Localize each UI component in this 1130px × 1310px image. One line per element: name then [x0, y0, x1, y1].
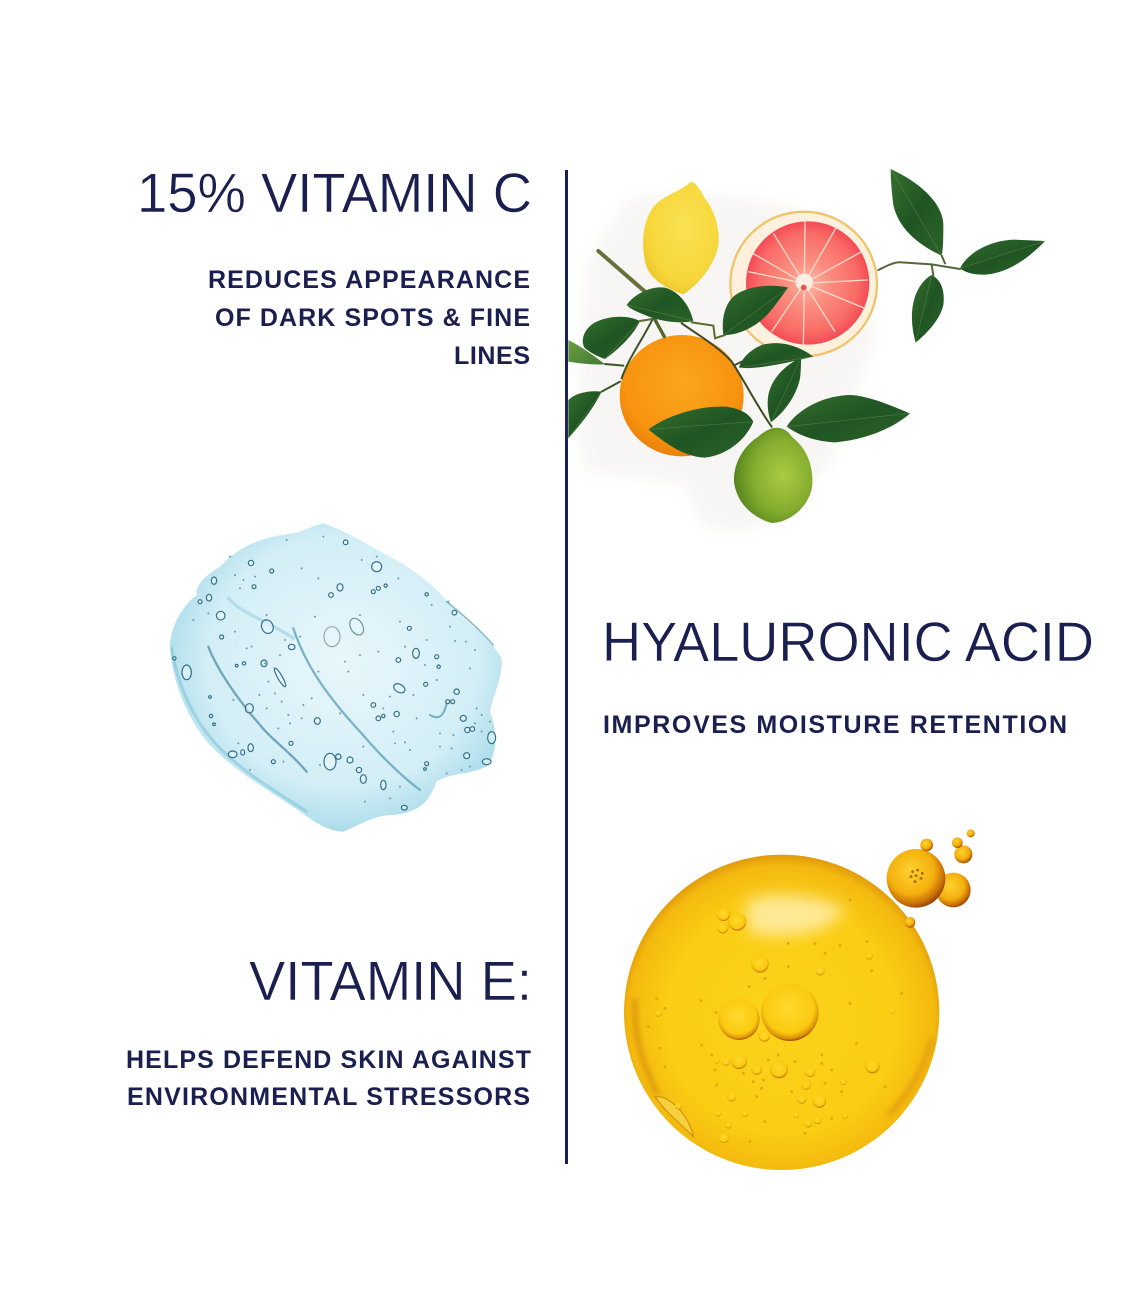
- text block: vitamin C benefit: OF DARK SPOTS & FINE: [215, 304, 530, 332]
- text block: vitamin E benefit: ENVIRONMENTAL STRESSORS: [127, 1083, 530, 1111]
- leaves: [568, 169, 1045, 458]
- lemon: [643, 182, 719, 294]
- gel bubbles: [173, 540, 496, 810]
- text block: vitamin C benefit: REDUCES APPEARANCE: [208, 266, 530, 294]
- centre divider line: [565, 170, 568, 1164]
- satellite inner bubble cluster: [911, 870, 922, 882]
- outer satellite bubbles: [887, 829, 975, 928]
- text block: vitamin C benefit: [208, 266, 530, 370]
- heading: 15% Vitamin C: 15% VITAMIN C: [137, 161, 532, 224]
- panel: hyaluronic acid text: [602, 610, 1094, 739]
- grapefruit: [730, 212, 877, 356]
- text block: hyaluronic acid benefit: IMPROVES MOISTURE RETENTION: [603, 711, 1067, 739]
- oil tiny bubbles: [648, 900, 902, 1142]
- heading: Hyaluronic Acid: HYALURONIC ACID: [602, 610, 1094, 673]
- text block: vitamin C benefit: LINES: [454, 342, 530, 370]
- gel ridges: [172, 598, 493, 812]
- gel tiny bubbles: [193, 537, 490, 802]
- panel: vitamin E text: [126, 949, 532, 1111]
- oil bubbles large: [655, 908, 895, 1143]
- text block: vitamin E benefit: [126, 1046, 531, 1111]
- illustration: hyaluronic gel swatch: [170, 523, 502, 832]
- illustration: citrus fruits and leaves: [568, 169, 1045, 532]
- droplet shine and rim: [635, 895, 932, 1137]
- heading: Vitamin E: VITAMIN E:: [249, 949, 532, 1012]
- text block: vitamin E benefit: HELPS DEFEND SKIN AGAINST: [126, 1046, 531, 1074]
- lime: [734, 428, 812, 523]
- illustration: vitamin E oil droplet: [624, 829, 975, 1170]
- stems: [598, 251, 960, 427]
- panel: vitamin C text: [137, 161, 532, 370]
- orange: [620, 335, 744, 456]
